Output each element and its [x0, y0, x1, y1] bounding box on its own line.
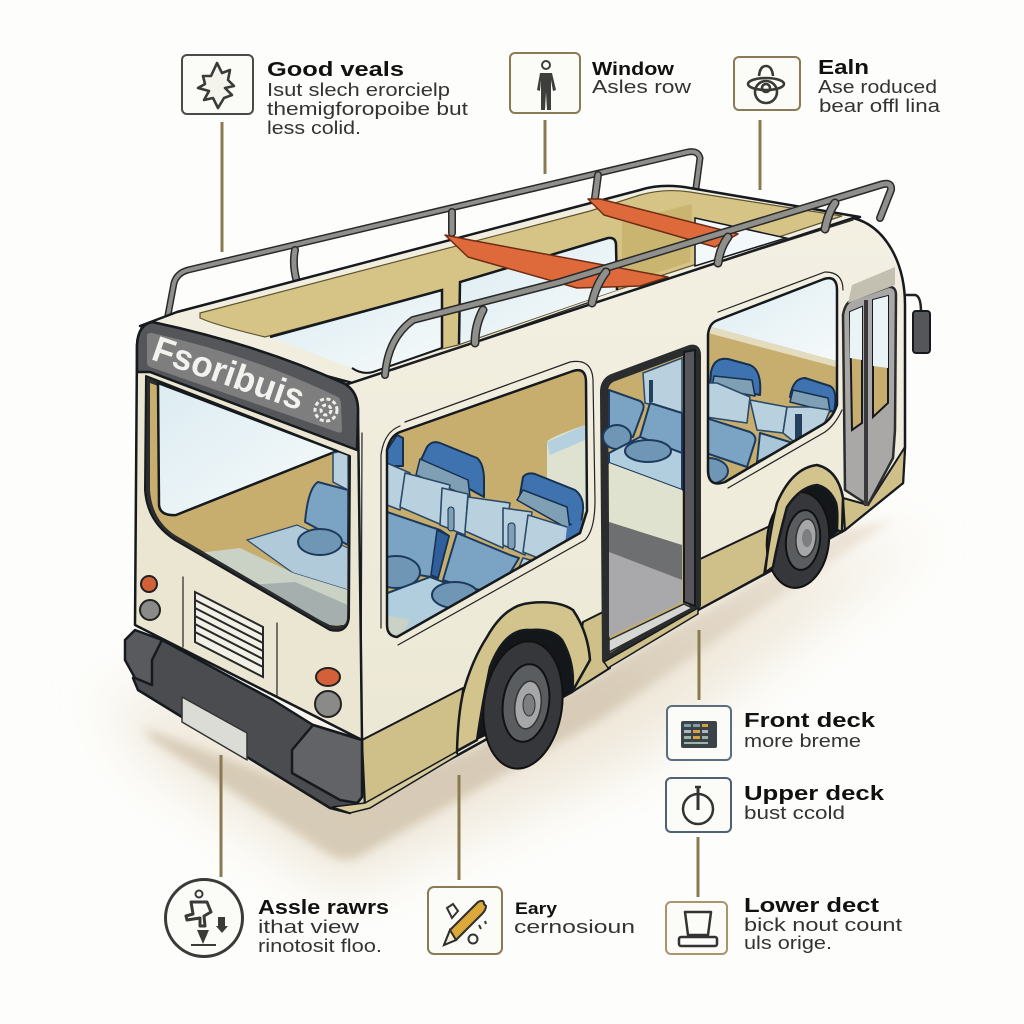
- text: Assle rawrs body: [258, 917, 382, 956]
- text: Ealn body: Ase roduced: [818, 77, 937, 97]
- text: Good veals body: themigforopoibe but: [267, 99, 468, 119]
- ground shadow: [105, 520, 930, 890]
- door seats: [643, 358, 682, 413]
- text: Ealn body: bear offl lina: [819, 96, 941, 116]
- callout: Eary: [428, 887, 635, 954]
- front face: [135, 322, 362, 740]
- roof glass 1: [270, 290, 442, 373]
- roof rim: [140, 186, 860, 385]
- callout: Lower deck: [666, 895, 902, 954]
- license plate: [182, 697, 247, 760]
- callout: Window: [510, 53, 692, 113]
- icon: figure: [186, 890, 228, 946]
- icon: panel: [681, 721, 717, 748]
- window 1 seats: [372, 425, 587, 640]
- cushion: [388, 555, 421, 589]
- front grille: [195, 592, 263, 677]
- front wheel arch: [457, 602, 590, 751]
- text: Lower deck body: uls orige.: [744, 933, 832, 953]
- door glass left: [850, 307, 862, 430]
- callout: Upper deck: [666, 778, 885, 832]
- text: Lower deck: Lower dect: [744, 895, 879, 917]
- text: Assle rawrs body: rinotosit floo.: [258, 936, 382, 956]
- destination text: Fsoribuis: [147, 328, 310, 418]
- text: Good veals body: Isut slech erorcielp: [267, 80, 450, 100]
- front wheel: [457, 602, 590, 774]
- icon: pacifier: [748, 66, 784, 103]
- text: Upper deck: Upper deck: [744, 783, 885, 805]
- callout: Ealn: [734, 57, 941, 116]
- text: Front deck body: more breme: [744, 731, 861, 751]
- rear wheel arch: [765, 465, 843, 573]
- bottom sill: [332, 752, 458, 813]
- side door opening: [603, 349, 697, 660]
- orange roof bars: [445, 199, 738, 288]
- sign panel: [147, 328, 342, 433]
- rear door: [843, 267, 896, 506]
- roof glass 2: [459, 238, 617, 344]
- text: Eary body: cernosioun: [514, 917, 635, 937]
- text: Ealn body: [818, 77, 941, 116]
- text: Assle rawrs body: ithat view: [258, 917, 360, 937]
- icon: person: [537, 61, 556, 110]
- side window 2: [706, 271, 844, 489]
- windshield glass: [158, 383, 337, 515]
- sign gear icon: [315, 399, 337, 421]
- text: Good veals body: less colid.: [267, 118, 361, 138]
- far roof rail: [168, 152, 700, 315]
- side window 1: [372, 361, 595, 645]
- near roof rail: [385, 184, 891, 375]
- text: Good veals body: [267, 80, 468, 138]
- icon: stopwatch: [683, 787, 713, 824]
- icon: leaf flame: [198, 63, 234, 108]
- callout: Assle rawrs: [166, 880, 389, 956]
- text: Assle rawrs: Assle rawrs: [258, 897, 389, 919]
- front seat group: [198, 450, 348, 625]
- text: Lower deck body: bick nout count: [744, 915, 902, 935]
- front seat 2: [443, 533, 519, 592]
- roof opening: [200, 191, 842, 373]
- roof glass 3: [695, 218, 786, 266]
- text: Lower deck body: [744, 915, 902, 953]
- icon: seat: [679, 912, 717, 946]
- callout: Good veals: [182, 55, 468, 138]
- door glass right: [873, 296, 888, 417]
- door floor: [609, 522, 682, 580]
- icon: pencil: [444, 901, 486, 945]
- front seat 1: [387, 512, 449, 578]
- callout lines: [221, 120, 760, 897]
- door seat block: [609, 463, 682, 545]
- text: Ealn: Ealn: [818, 57, 869, 79]
- text: Good veals: Good veals: [267, 59, 404, 81]
- text: Front deck: Front deck: [744, 710, 876, 732]
- text: Upper deck body: bust ccold: [744, 803, 845, 823]
- callout: Front deck: [667, 706, 876, 760]
- text: Eary: Eary: [515, 899, 558, 918]
- window 2 seats: [709, 279, 836, 482]
- door sill: [604, 608, 698, 668]
- front lights: [140, 576, 341, 717]
- text: Window: Window: [592, 59, 675, 79]
- rear wheel: [762, 465, 843, 591]
- mirror: [905, 295, 930, 353]
- text: Window body: Asles row: [592, 77, 692, 97]
- front window: [145, 376, 350, 631]
- skirt tan: [362, 447, 905, 805]
- bumper: [125, 630, 362, 813]
- bus body side: [345, 218, 905, 805]
